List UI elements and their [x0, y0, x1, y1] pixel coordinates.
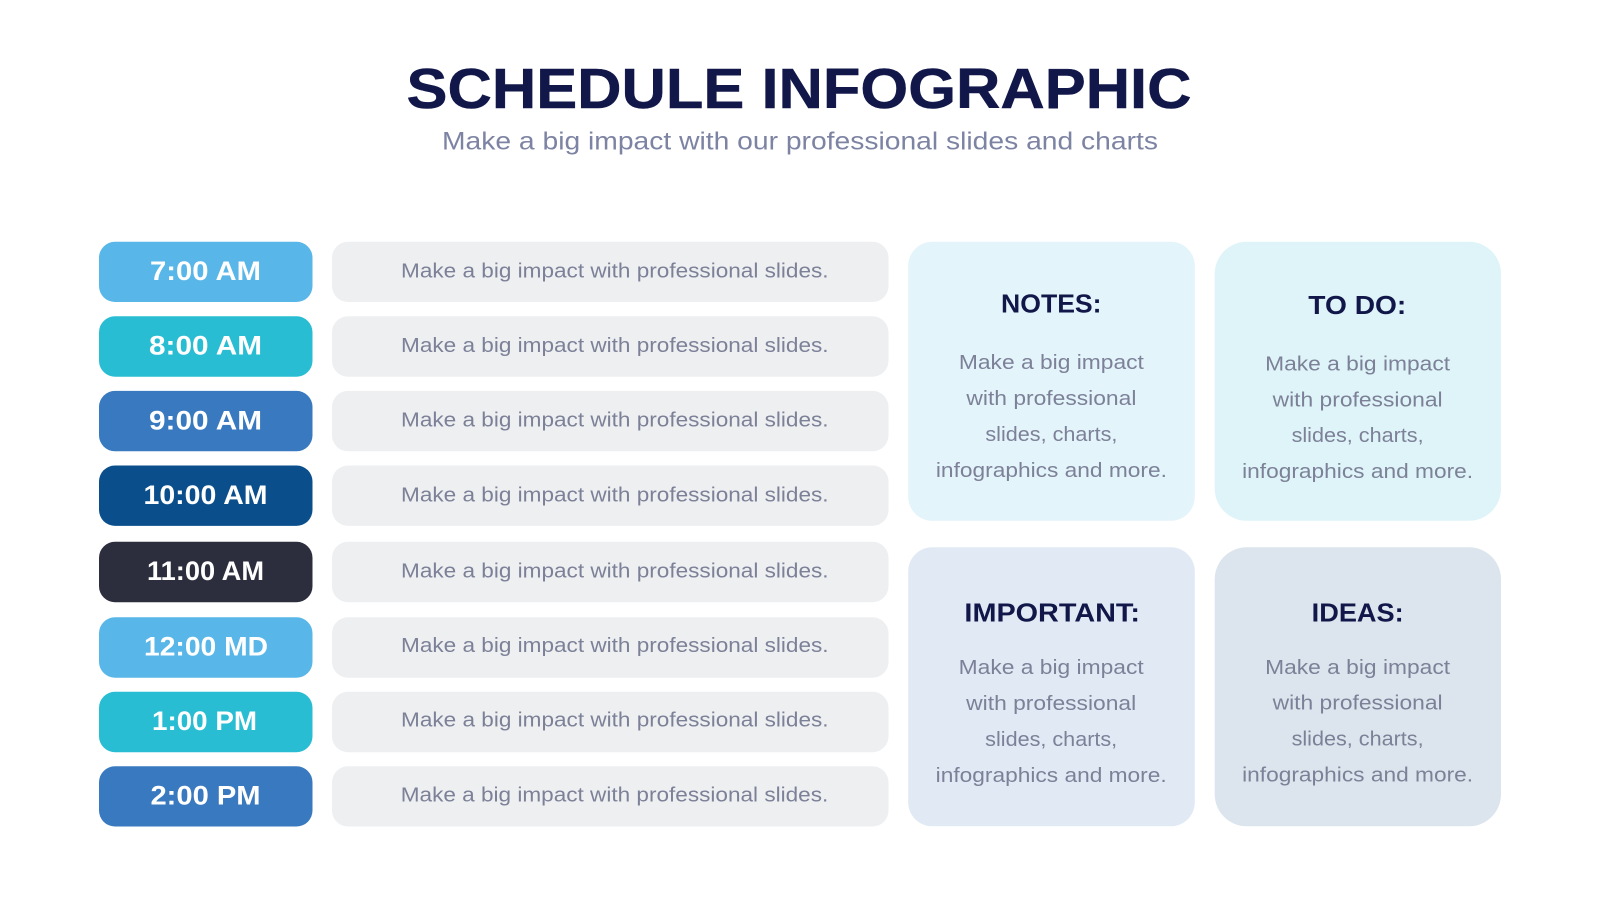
time slot: 2:00 PM: 2:00 PM: [150, 780, 260, 810]
description row 1: Make a big impact with professional slides.: [401, 260, 829, 282]
heading: ideas: IDEAS:: [1312, 600, 1404, 628]
time slot: 10:00 AM: 10:00 AM: [144, 480, 268, 510]
text block: notes: [936, 352, 1167, 482]
text block: important: Make a big impact: [959, 657, 1144, 679]
text block: to do: [1242, 354, 1473, 483]
heading: to do: TO DO:: [1308, 292, 1406, 320]
time slot: 7:00 AM: 7:00 AM: [150, 256, 261, 286]
subtitle: Make a big impact with our professional slides and charts: [442, 128, 1158, 156]
panel: to do: [1215, 242, 1501, 521]
text block: ideas: Make a big impact: [1265, 657, 1451, 679]
time slot: 7:00 AM: [99, 242, 312, 302]
description row 2: [332, 316, 888, 377]
text block: notes: slides, charts,: [985, 424, 1117, 446]
heading: notes: NOTES:: [1001, 290, 1102, 318]
text block: to do: with professional: [1271, 389, 1443, 411]
text block: to do: slides, charts,: [1292, 425, 1424, 447]
description row 8: Make a big impact with professional slides.: [401, 784, 828, 806]
time slot: 9:00 AM: [99, 391, 312, 451]
description row 4: Make a big impact with professional slides.: [401, 485, 829, 507]
text block: ideas: slides, charts,: [1292, 729, 1424, 751]
description row 1: [332, 242, 888, 302]
description row 5: Make a big impact with professional slides.: [401, 560, 829, 582]
description row 8: [332, 766, 888, 826]
description row 6: Make a big impact with professional slides.: [401, 635, 829, 657]
description row 6: [332, 617, 888, 678]
text block: notes: Make a big impact: [959, 352, 1144, 374]
description row 7: [332, 692, 888, 752]
heading: important: IMPORTANT:: [964, 599, 1140, 627]
text block: ideas: infographics and more.: [1242, 765, 1473, 787]
description row 7: Make a big impact with professional slides.: [401, 710, 829, 732]
time slot: 8:00 AM: 8:00 AM: [149, 331, 262, 361]
text block: ideas: with professional: [1271, 693, 1443, 715]
text block: notes: with professional: [965, 388, 1136, 410]
panel: important: [908, 547, 1195, 826]
time slot: 1:00 PM: 1:00 PM: [152, 706, 257, 736]
time slot: 1:00 PM: [99, 692, 312, 752]
time slot: 8:00 AM: [99, 316, 312, 377]
text block: important: infographics and more.: [936, 765, 1167, 787]
description row 2: Make a big impact with professional slides.: [401, 335, 829, 357]
description row 5: [332, 542, 888, 602]
time slot: 12:00 MD: [99, 617, 312, 678]
time slot: 10:00 AM: [99, 466, 312, 526]
text block: important: [936, 657, 1167, 787]
text block: notes: infographics and more.: [936, 460, 1167, 482]
panel: ideas: [1215, 547, 1501, 826]
time slot: 11:00 AM: 11:00 AM: [147, 556, 264, 586]
panel: notes: [908, 242, 1195, 521]
text block: important: with professional: [965, 693, 1136, 715]
text block: to do: infographics and more.: [1242, 461, 1473, 483]
time slot: 11:00 AM: [99, 542, 312, 602]
time slot: 9:00 AM: 9:00 AM: [149, 406, 262, 436]
description row 4: [332, 466, 888, 526]
text block: important: slides, charts,: [985, 729, 1117, 751]
title: SCHEDULE INFOGRAPHIC: [406, 57, 1192, 121]
time slot: 12:00 MD: 12:00 MD: [144, 632, 268, 662]
time slot: 2:00 PM: [99, 766, 312, 826]
text block: to do: Make a big impact: [1265, 354, 1451, 376]
description row 3: [332, 391, 888, 451]
text block: ideas: [1242, 657, 1473, 787]
description row 3: Make a big impact with professional slides.: [401, 410, 829, 432]
